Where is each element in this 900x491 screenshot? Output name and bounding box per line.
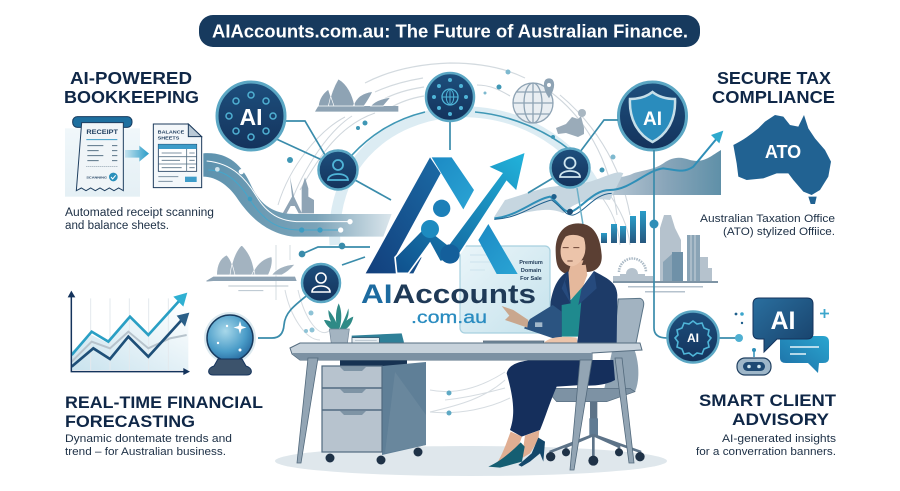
heading: AI-powered bookkeeping xyxy=(64,68,199,107)
skyline: right xyxy=(613,215,718,292)
node: network globe xyxy=(426,73,474,121)
icon: balance sheets document: SHEETS xyxy=(158,135,179,140)
heading: real-time financial forecasting xyxy=(65,393,263,431)
heading: secure tax compliance: SECURE TAX xyxy=(717,68,831,88)
description: advisory: AI-generated insights xyxy=(722,433,837,445)
heading: smart client advisory: ADVISORY xyxy=(732,410,830,429)
books xyxy=(352,333,404,346)
description: tax compliance: Australian Taxation Office xyxy=(700,213,835,225)
line chart: rising trends xyxy=(68,291,190,375)
laptop xyxy=(483,341,544,347)
desk legs xyxy=(297,358,634,470)
arm and sleeve xyxy=(524,305,562,338)
blazer xyxy=(550,271,617,345)
plant xyxy=(324,303,353,346)
logo: AI Accounts mark xyxy=(366,152,526,274)
heading: real-time financial forecasting: FORECASTING xyxy=(65,412,195,431)
icon: AI speech bubbles xyxy=(735,298,829,373)
icon: receipt: SCANNING xyxy=(86,175,108,179)
icon: receipt xyxy=(65,117,140,197)
logo wordmark: AIAccounts.com.au xyxy=(361,279,536,327)
description: advisory xyxy=(696,433,837,458)
hand on keyboard xyxy=(544,337,578,344)
icon: small gray Australia xyxy=(556,116,584,137)
teal blouse xyxy=(560,287,583,337)
drawer cabinet xyxy=(322,362,426,464)
face xyxy=(561,235,586,266)
heading: secure tax compliance: COMPLIANCE xyxy=(712,87,835,107)
title banner: AIAccounts.com.au: The Future of Australian Finance. xyxy=(212,22,688,42)
icon: Sydney Opera House top xyxy=(315,79,398,112)
trousers xyxy=(507,360,615,437)
screen label: premium domain: For Sale xyxy=(520,276,542,282)
shoes xyxy=(488,442,525,468)
node: AI shield: AI xyxy=(643,109,662,130)
node: AI circle: AI xyxy=(240,104,262,130)
heading: AI-powered bookkeeping: BOOKKEEPING xyxy=(64,87,199,107)
connector: vertical line to advisory node xyxy=(650,150,743,342)
icon: Sydney Opera House lower xyxy=(206,245,297,291)
chair xyxy=(545,298,645,466)
description: bookkeeping: Automated receipt scanning xyxy=(65,207,214,219)
neck xyxy=(567,260,587,300)
desk top xyxy=(290,343,642,360)
node: person left xyxy=(318,150,358,190)
description: forecasting: Dynamic dontemate trends and xyxy=(65,433,232,445)
ankles xyxy=(497,430,539,463)
description: bookkeeping: and balance sheets. xyxy=(65,220,169,232)
node: person right xyxy=(528,148,590,193)
panel: smart client advisory xyxy=(668,298,837,458)
floor shadow xyxy=(275,446,667,476)
person: woman at desk xyxy=(483,223,617,468)
node: person lower xyxy=(302,264,340,302)
icon: gray globe with pin xyxy=(513,79,554,123)
node: AI gear xyxy=(668,312,718,362)
heading: smart client advisory xyxy=(699,391,837,429)
heading: real-time financial forecasting: REAL-TIME FINANCIAL xyxy=(65,393,263,412)
icon: balance sheets document: BALANCE xyxy=(158,129,184,134)
title banner xyxy=(199,15,700,47)
node: AI circle xyxy=(217,82,285,150)
icon: AI speech bubbles: AI xyxy=(770,307,796,335)
logo wordmark: AIAccounts.com.au: .com.au xyxy=(411,307,487,327)
logo wordmark: AIAccounts.com.au: AIAccounts xyxy=(361,279,536,309)
description: bookkeeping xyxy=(65,207,214,232)
panel: real-time financial forecasting xyxy=(65,291,263,458)
network dots right xyxy=(484,70,616,172)
icon: robot xyxy=(737,348,771,375)
icon: balance sheets document xyxy=(153,124,202,188)
icon: Eiffel tower and spire xyxy=(283,177,314,213)
hand pointing xyxy=(502,306,528,328)
node: AI gear: AI xyxy=(687,331,699,345)
description: tax compliance xyxy=(700,213,835,238)
connector: shield to person xyxy=(580,120,618,152)
flow ribbon: left xyxy=(203,153,392,237)
icon: receipt: RECEIPT xyxy=(86,130,118,136)
heading: secure tax compliance xyxy=(712,68,835,107)
icon: crystal ball xyxy=(204,312,256,375)
hair xyxy=(556,223,602,273)
screen label: premium domain: Domain xyxy=(521,268,542,274)
map: Australia with ATO: ATO xyxy=(765,142,801,162)
panel: secure tax compliance xyxy=(700,68,835,238)
node: AI shield xyxy=(618,82,686,150)
heading: smart client advisory: SMART CLIENT xyxy=(699,391,837,410)
description: forecasting: trend – for Australian business. xyxy=(65,446,226,458)
connector lines: AI node to person xyxy=(272,120,450,200)
description: forecasting xyxy=(65,433,232,458)
translucent screen xyxy=(460,246,550,333)
panel: AI-powered bookkeeping xyxy=(64,68,214,232)
lower network lines xyxy=(258,244,452,416)
heading: AI-powered bookkeeping: AI-POWERED xyxy=(70,68,192,88)
arrow: receipt to balance sheets xyxy=(125,146,149,162)
chart ribbon: right with rising arrow xyxy=(494,131,723,220)
bar chart: centre right xyxy=(601,211,646,243)
description: tax compliance: (ATO) stylized Offiice. xyxy=(723,226,835,238)
screen label: premium domain: Premium xyxy=(519,260,543,266)
background decorative arcs xyxy=(276,63,630,413)
connector: to central screen xyxy=(577,188,586,243)
desk under panel xyxy=(340,358,407,366)
map: Australia with ATO xyxy=(733,115,831,204)
desk xyxy=(290,343,642,470)
screen label: premium domain xyxy=(519,260,543,282)
description: advisory: for a converration banners. xyxy=(696,446,836,458)
